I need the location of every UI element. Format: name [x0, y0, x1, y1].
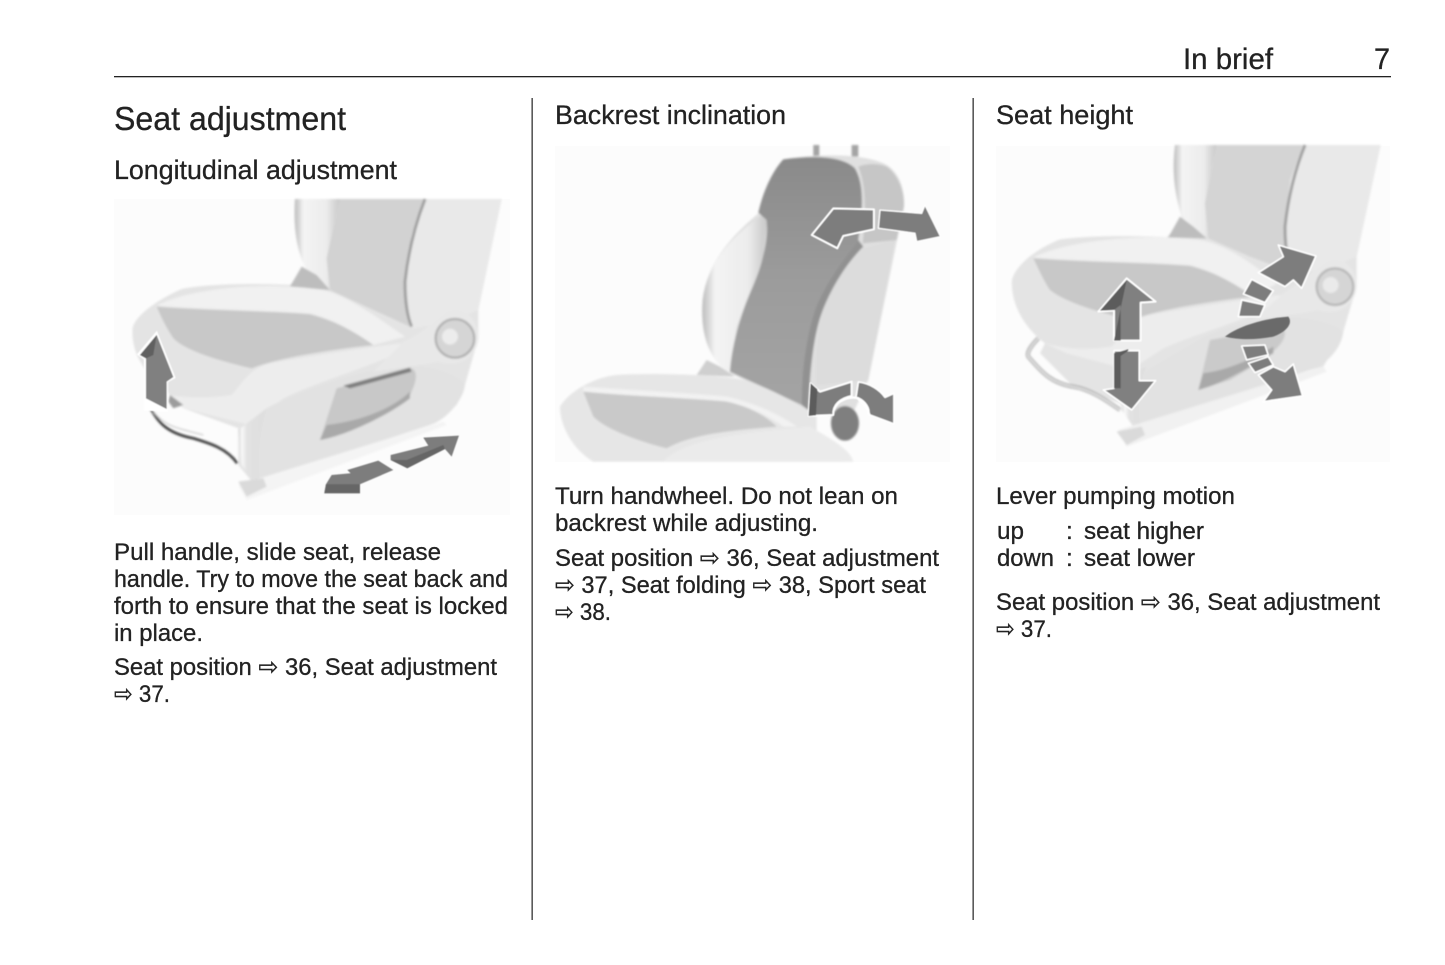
text: cross references: ⇨ 38.	[555, 599, 611, 626]
text: cross references: Seat position ⇨ 36, Seat adjustment	[996, 589, 1380, 616]
text: cross references: ⇨ 37.	[114, 681, 170, 708]
text: instructions: Turn handwheel. Do not lean on	[555, 483, 898, 510]
text: instructions	[555, 483, 898, 537]
lever	[1225, 317, 1290, 339]
title: Seat adjustment	[114, 100, 346, 137]
arrows: slide seat forward and back	[324, 436, 459, 493]
text: instructions: in place.	[114, 620, 203, 647]
arrow: handle pull up	[138, 332, 175, 411]
text: instructions: forth to ensure that the seat is locked	[114, 593, 508, 620]
arrow: seat up	[1098, 278, 1156, 341]
text: cross references: ⇨ 37.	[996, 616, 1052, 643]
text: up and down definitions: down	[997, 545, 1054, 572]
text: cross references: Seat position ⇨ 36, Seat adjustment	[114, 654, 497, 681]
illustration: seat with height arrows	[996, 145, 1390, 462]
text: instructions: backrest while adjusting.	[555, 510, 818, 537]
illustration: seat with handle and slide arrows	[114, 199, 510, 515]
text: up and down definitions: :	[1066, 545, 1073, 572]
illustration: backrest with handwheel arrows	[555, 145, 950, 462]
text: cross references	[996, 589, 1380, 643]
text: instructions	[114, 539, 508, 647]
text: cross references	[555, 545, 939, 626]
running header: In brief	[1183, 43, 1274, 76]
column: backrest inclination	[555, 100, 950, 626]
running header	[114, 43, 1391, 77]
running header: 7	[1374, 43, 1390, 76]
text: up and down definitions: seat lower	[1084, 545, 1195, 572]
text: up and down definitions: :	[1066, 518, 1073, 545]
text: up and down definitions: up	[997, 518, 1024, 545]
text: up and down definitions: seat higher	[1084, 518, 1204, 545]
text: instructions: Lever pumping motion	[996, 483, 1235, 510]
heading: backrest inclination: Backrest inclination	[555, 100, 786, 130]
column: longitudinal adjustment	[114, 100, 510, 708]
text: instructions: handle. Try to move the seat back and	[114, 566, 508, 593]
text: cross references: ⇨ 37, Seat folding ⇨ 38, Sport seat	[555, 572, 926, 599]
arrow: recline backward	[878, 205, 941, 242]
text: cross references: Seat position ⇨ 36, Seat adjustment	[555, 545, 939, 572]
text: instructions: Pull handle, slide seat, release	[114, 539, 441, 566]
heading: longitudinal adjustment: Longitudinal adjustment	[114, 155, 397, 185]
arrows: handwheel rotation	[809, 382, 894, 424]
heading: seat height: Seat height	[996, 100, 1133, 130]
column: seat height	[996, 100, 1390, 643]
arrows: lever pump up	[1238, 245, 1316, 317]
arrows: lever pump down	[1242, 345, 1303, 402]
text: up and down definitions	[997, 518, 1204, 572]
text: cross references	[114, 654, 497, 708]
arrow: recline forward	[812, 208, 874, 248]
arrow: seat down	[1103, 349, 1156, 410]
